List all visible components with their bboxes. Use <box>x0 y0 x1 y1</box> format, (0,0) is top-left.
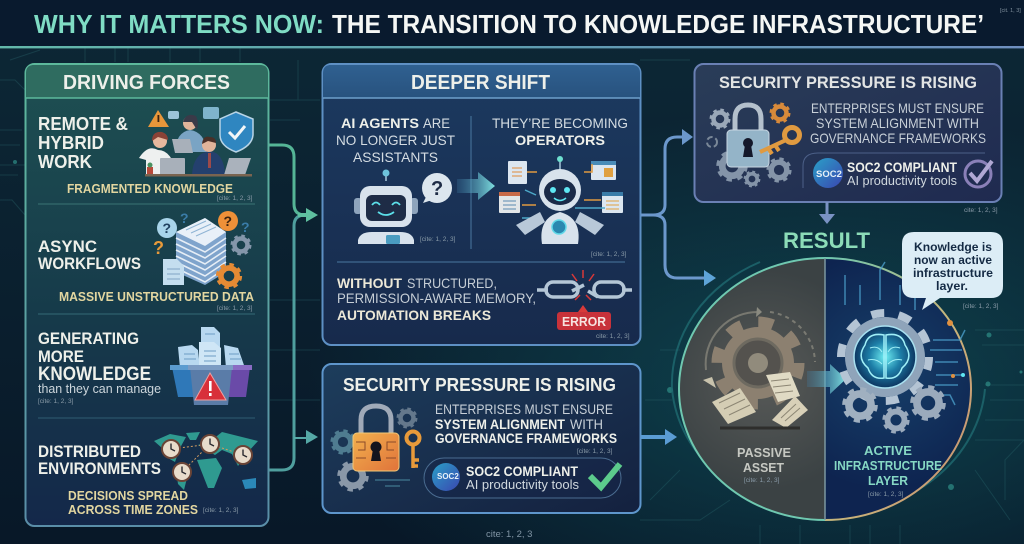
arrow: passive to active <box>807 364 846 394</box>
icon: document stack: ? <box>241 219 250 235</box>
text: enterprises must ensure: SYSTEM ALIGNMENT <box>435 416 565 432</box>
label: passive asset: PASSIVE <box>737 445 791 460</box>
result circle <box>672 258 985 520</box>
arrow: security pressure to result circle <box>641 429 677 445</box>
callout: knowledge is now active infrastructure: infrastructure <box>913 268 993 280</box>
item: generating more knowledge: than they can manage <box>38 381 161 396</box>
item: remote and hybrid work: FRAGMENTED KNOWLEDGE <box>67 182 233 196</box>
icon: steel padlock and key <box>707 104 800 186</box>
icon: assistant robot <box>354 170 456 244</box>
item: generating more knowledge: MORE <box>38 347 84 366</box>
item: remote and hybrid work: REMOTE & <box>38 114 128 134</box>
label: active infrastructure layer: LAYER <box>868 473 909 488</box>
text: they're becoming operators: OPERATORS <box>515 132 605 148</box>
heading: deeper shift: DEEPER SHIFT <box>411 72 550 94</box>
label: passive asset: ASSET <box>743 460 784 475</box>
text: AI agents are no longer just assistants: AI AGENTS <box>341 115 419 131</box>
text: without structured memory automation breaks: WITHOUT <box>337 275 402 291</box>
heading: security pressure upper: SECURITY PRESSURE IS RISING <box>719 73 977 92</box>
text: enterprises must ensure: WITH <box>570 416 603 432</box>
icon: world map with clocks <box>154 432 258 490</box>
badge: SOC2 compliant lower <box>424 458 621 498</box>
item: generating more knowledge: KNOWLEDGE <box>38 364 151 385</box>
panel: driving forces <box>26 64 268 526</box>
item: distributed environments: [cite: 1, 2, 3] <box>203 507 239 514</box>
item: remote and hybrid work: WORK <box>38 152 92 172</box>
callout: knowledge is now active infrastructure: layer. <box>936 281 968 293</box>
citation: upper panel: cite: 1, 2, 3] <box>964 207 998 214</box>
title: [cit. 1, 3] <box>1000 8 1021 14</box>
text: enterprises must ensure upper: SYSTEM ALIGNMENT WITH <box>816 115 979 131</box>
title <box>34 8 1021 39</box>
item: generating more knowledge: [cite: 1, 2, 3] <box>38 398 74 405</box>
icon: operator robot <box>499 156 627 258</box>
label: active infrastructure layer: INFRASTRUCTURE <box>834 458 942 473</box>
item: async workflows <box>38 210 254 312</box>
icon: document stack: ? <box>153 238 164 258</box>
text: without structured memory automation breaks: PERMISSION-AWARE MEMORY, <box>337 290 536 306</box>
text: AI agents are no longer just assistants <box>336 115 455 165</box>
item: generating more knowledge: GENERATING <box>38 329 139 348</box>
callout: knowledge is now active infrastructure: now an active <box>914 255 992 267</box>
heading: driving forces: DRIVING FORCES <box>63 72 230 94</box>
text: enterprises must ensure: GOVERNANCE FRAMEWORKS <box>435 430 617 446</box>
panel: security pressure upper <box>694 64 1002 202</box>
badge: SOC2 compliant upper: SOC2 <box>816 169 842 180</box>
badge: SOC2 compliant lower: AI productivity tools <box>466 477 579 492</box>
text: enterprises must ensure upper: ENTERPRISES MUST ENSURE <box>811 100 984 116</box>
icon: overflowing bins <box>170 327 252 405</box>
text: enterprises must ensure: [cite: 1, 2, 3] <box>577 448 613 455</box>
item: distributed environments: ENVIRONMENTS <box>38 459 161 478</box>
icon: broken passive gear <box>703 307 815 428</box>
text: without structured memory automation breaks: STRUCTURED, <box>407 275 497 291</box>
icon: assistant robot: [cite: 1, 2, 3] <box>420 236 456 243</box>
arrow: assistant to operator <box>457 172 495 200</box>
text: they're becoming operators: THEY’RE BECOMING <box>492 115 628 131</box>
icon: broken chain with error <box>537 270 632 340</box>
title: THE TRANSITION TO KNOWLEDGE INFRASTRUCTURE’ <box>332 9 984 39</box>
badge: SOC2 compliant upper <box>803 153 992 188</box>
icon: document stack: ? <box>162 220 171 236</box>
panel: security pressure lower <box>322 364 640 513</box>
text: without structured memory automation breaks <box>337 275 536 323</box>
callout: knowledge is now active infrastructure: Knowledge is <box>914 242 992 254</box>
callout: knowledge is now active infrastructure <box>902 232 1003 310</box>
item: async workflows: MASSIVE UNSTRUCTURED DATA <box>59 290 254 304</box>
item: distributed environments: ACROSS TIME ZONES <box>68 503 198 517</box>
item: remote and hybrid work <box>38 107 253 202</box>
arrow: deeper shift to security pressure and result <box>641 129 716 286</box>
icon: orange padlock <box>332 406 420 490</box>
label: passive asset: [cite: 1, 2, 3] <box>744 477 780 484</box>
badge: SOC2 compliant lower: SOC2 <box>437 472 459 481</box>
text: enterprises must ensure upper <box>810 100 986 146</box>
item: async workflows: WORKFLOWS <box>38 254 141 273</box>
badge: SOC2 compliant lower: SOC2 COMPLIANT <box>466 464 579 479</box>
badge: SOC2 compliant upper: AI productivity tools <box>847 174 957 188</box>
text: AI agents are no longer just assistants: NO LONGER JUST <box>336 132 455 148</box>
text: enterprises must ensure <box>435 401 617 455</box>
text: they're becoming operators <box>492 115 628 148</box>
text: AI agents are no longer just assistants: ARE <box>423 115 450 131</box>
arrow: upper security to result <box>819 202 835 224</box>
arrow: driving forces to security pressure <box>294 430 318 444</box>
badge: SOC2 compliant upper: SOC2 COMPLIANT <box>847 160 958 175</box>
icon: operator robot: [cite: 1, 2, 3] <box>591 251 627 258</box>
citation: callout: [cite: 1, 2, 3] <box>963 303 999 310</box>
title: WHY IT MATTERS NOW: <box>34 9 324 39</box>
icon: document stack: ? <box>180 210 189 226</box>
item: distributed environments: DISTRIBUTED <box>38 442 141 461</box>
text: enterprises must ensure: ENTERPRISES MUST ENSURE <box>435 401 613 417</box>
icon: active brain gear <box>841 262 965 432</box>
arrow: driving forces to deeper shift <box>268 145 318 470</box>
text: AI agents are no longer just assistants: ASSISTANTS <box>353 149 438 165</box>
label: active infrastructure layer: [cite: 1, 2, 3] <box>868 491 904 498</box>
panel: deeper shift <box>322 64 640 345</box>
item: remote and hybrid work: [cite: 1, 2, 3] <box>217 195 253 202</box>
icon: document stack: ? <box>224 213 232 229</box>
heading: result: RESULT <box>783 228 871 253</box>
icon: remote workers <box>139 107 253 176</box>
item: async workflows: ASYNC <box>38 237 97 256</box>
icon: assistant robot: ? <box>431 178 443 200</box>
label: passive asset <box>737 445 791 484</box>
heading: security pressure lower: SECURITY PRESSURE IS RISING <box>343 375 616 395</box>
label: active infrastructure layer <box>834 443 942 498</box>
icon: broken chain with error: ERROR <box>562 314 607 329</box>
text: without structured memory automation breaks: AUTOMATION BREAKS <box>337 307 491 323</box>
item: distributed environments <box>38 432 258 517</box>
item: async workflows: [cite: 1, 2, 3] <box>217 305 253 312</box>
citation: footer: cite: 1, 2, 3 <box>486 529 532 540</box>
icon: document stack <box>153 210 250 287</box>
text: enterprises must ensure upper: GOVERNANCE FRAMEWORKS <box>810 130 986 146</box>
item: generating more knowledge <box>38 327 252 405</box>
icon: broken chain with error: cite: 1, 2, 3] <box>596 333 630 340</box>
item: distributed environments: DECISIONS SPREAD <box>68 489 188 503</box>
label: active infrastructure layer: ACTIVE <box>864 443 912 458</box>
item: remote and hybrid work: HYBRID <box>38 133 104 153</box>
